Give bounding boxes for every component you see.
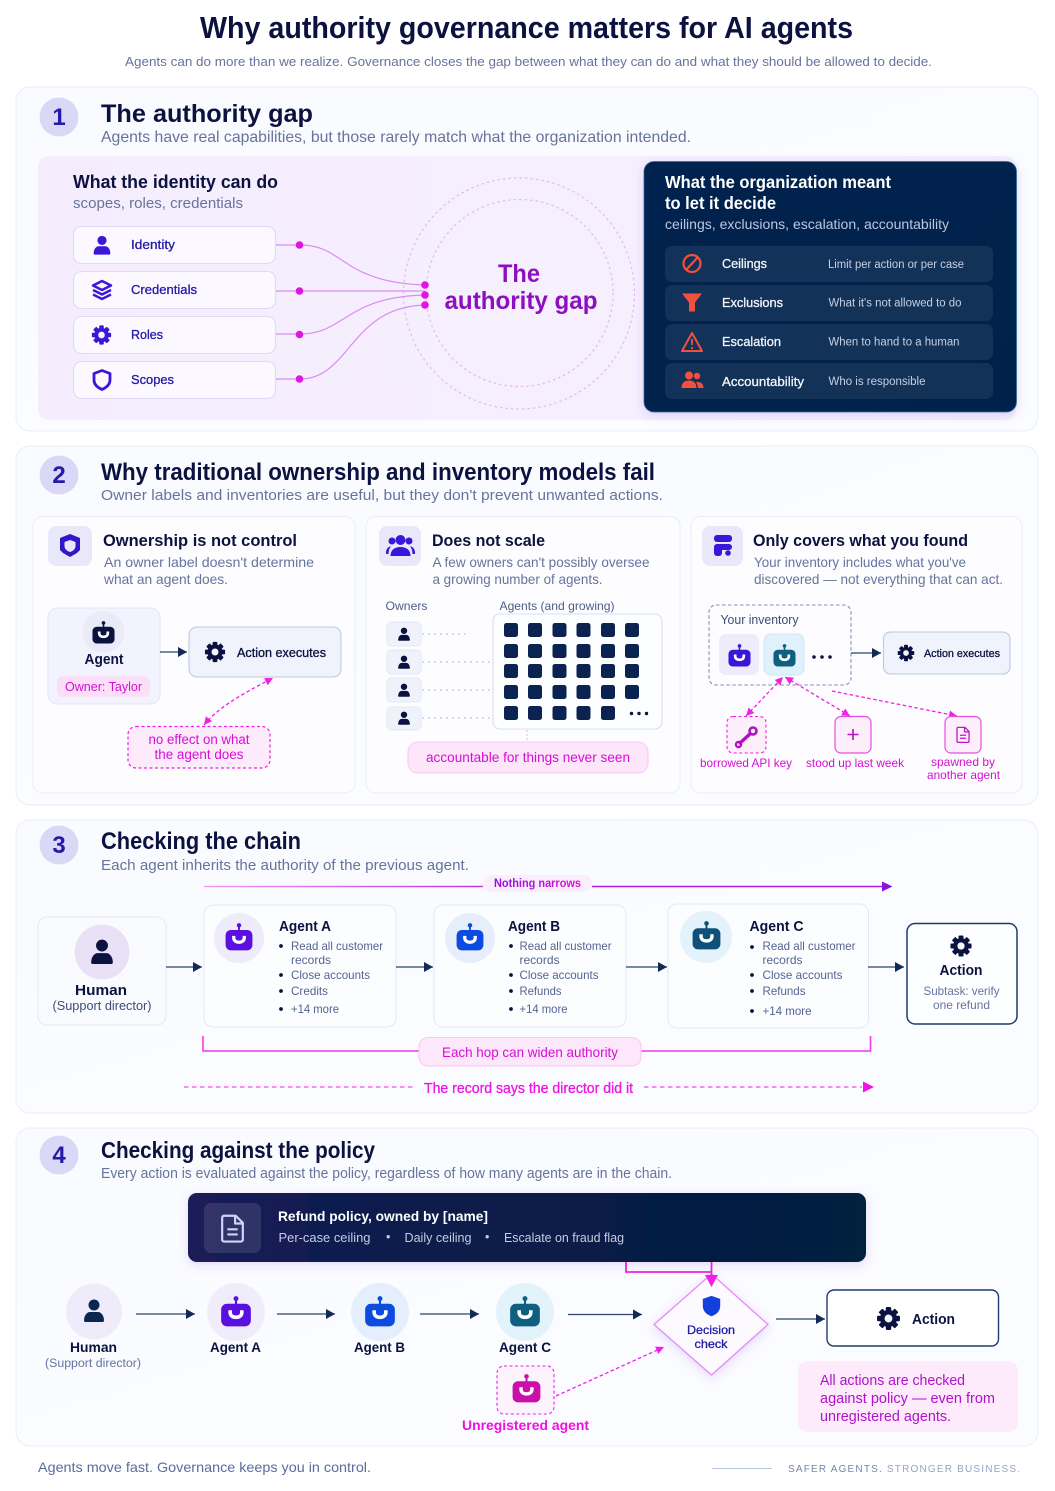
panel: section 3 checking the chain [16, 820, 1038, 1113]
action box: Action [940, 962, 982, 979]
flow node: human [45, 1284, 141, 1370]
row: accountability: Who is responsible [828, 376, 926, 388]
badge 4 [40, 1136, 78, 1174]
action box: one refund [933, 998, 990, 1012]
row: scopes: Scopes [131, 372, 174, 387]
agent box: Owner: Taylor [65, 680, 142, 694]
inventory box [709, 605, 851, 685]
arrow [396, 966, 433, 968]
dark panel: what the organization meant [644, 162, 1016, 412]
label: stood up last week: stood up last week [806, 756, 905, 770]
arrow [776, 1318, 825, 1320]
callout: all actions checked [798, 1361, 1018, 1432]
section description: Owner labels and inventories are useful, but they don't prevent unwanted actions. [101, 487, 663, 504]
card: only covers what you found [691, 516, 1022, 793]
flow node: human: (Support director) [45, 1358, 141, 1370]
decision check diamond: check [694, 1337, 729, 1351]
human box: Human [75, 982, 127, 999]
tile: spawned by another agent [945, 716, 981, 753]
agent A box: Credits [291, 984, 328, 998]
row: credentials: Credentials [131, 282, 197, 297]
card heading: Ownership is not control [103, 531, 297, 550]
badge 4: 4 [52, 1142, 66, 1169]
title: Why authority governance matters for AI agents [200, 10, 853, 45]
dotted links [422, 634, 493, 718]
card description: a growing number of agents. [432, 572, 602, 587]
card description [754, 555, 1003, 587]
arrow [420, 1313, 479, 1315]
agent B box: records [520, 953, 560, 967]
agent B box: Read all customer [520, 939, 612, 953]
section description: Every action is evaluated against the policy, regardless of how many agents are in the chain. [101, 1166, 672, 1182]
heading: The authority gap [101, 100, 313, 128]
card heading: Does not scale [432, 531, 545, 550]
action box: Subtask: verify [924, 984, 1000, 998]
badge 2 [40, 456, 78, 494]
gap circles [404, 178, 634, 409]
card description: what an agent does. [103, 572, 228, 587]
callout: no effect: no effect on what [148, 732, 250, 747]
connector from policy to decision [626, 1262, 718, 1287]
row: ceilings: Limit per action or per case [828, 259, 964, 271]
card description: A few owners can't possibly oversee [432, 555, 650, 570]
panel: section 1 the authority gap [16, 87, 1038, 431]
inventory box: Your inventory [720, 613, 799, 627]
policy items: Per-case ceiling [278, 1231, 371, 1245]
card description [103, 555, 314, 587]
agent grid [493, 614, 662, 729]
section description: Each agent inherits the authority of the previous agent. [101, 858, 469, 874]
dashed arrow: unregistered to decision [556, 1347, 664, 1396]
owner tiles [387, 622, 421, 730]
badge 3 [40, 826, 78, 864]
dark panel heading [665, 172, 891, 213]
footer slogan: SAFER AGENTS. STRONGER BUSINESS. [788, 1464, 1020, 1475]
agent C box: Agent C [750, 918, 804, 935]
agent B box: Refunds [520, 984, 562, 998]
policy items: • [386, 1230, 390, 1244]
unregistered agent [462, 1366, 589, 1433]
label: spawned by another agent [927, 755, 1001, 782]
arrow: nothing narrows: Nothing narrows [494, 878, 581, 890]
panel: section 4 checking against the policy [16, 1128, 1038, 1446]
tile: borrowed API key [727, 716, 766, 753]
arrow [166, 966, 202, 968]
agent B box: Agent B [508, 919, 560, 935]
action box: Action [912, 1311, 955, 1328]
bracket: each hop can widen authority [203, 1036, 870, 1066]
card heading: Only covers what you found [753, 531, 968, 550]
row: exclusions: What it's not allowed to do [828, 298, 962, 310]
owners label: Owners [386, 599, 428, 613]
left purple panel: identity [38, 156, 1016, 420]
row: credentials [74, 272, 276, 308]
section description: Agents have real capabilities, but those rarely match what the organization intended. [101, 129, 691, 146]
footer tagline: Agents move fast. Governance keeps you in control. [38, 1459, 371, 1475]
arrow [868, 966, 904, 968]
human box: (Support director) [52, 999, 152, 1013]
gap label: The [498, 260, 540, 288]
row: escalation: When to hand to a human [828, 336, 960, 348]
flow node: agent A: Agent A [210, 1339, 261, 1355]
agent A box: records [291, 953, 331, 967]
dashed arrows [746, 677, 957, 716]
dark panel subheading: ceilings, exclusions, escalation, accountability [665, 216, 949, 232]
identity subheading: scopes, roles, credentials [73, 196, 243, 212]
arrow: nothing narrows [204, 875, 892, 892]
row: escalation [665, 324, 993, 360]
action executes box [884, 632, 1010, 674]
policy bar [188, 1193, 866, 1262]
row: ceilings: Ceilings [722, 256, 767, 271]
label: borrowed API key: borrowed API key [700, 756, 792, 770]
dashed arrow: no effect [204, 678, 273, 725]
arrow [277, 1313, 335, 1315]
agent A box: +14 more [291, 1002, 339, 1016]
action box [827, 1290, 998, 1346]
dark panel heading: to let it decide [665, 193, 776, 213]
agent A box: Agent A [279, 919, 331, 935]
row: roles: Roles [131, 327, 163, 342]
unregistered agent: Unregistered agent [462, 1417, 589, 1433]
arrow to action [160, 651, 187, 653]
policy items: Daily ceiling [404, 1231, 472, 1245]
flow node: human: Human [70, 1339, 117, 1355]
row: identity [74, 226, 276, 264]
card description [432, 555, 650, 587]
pill: accountable: accountable for things never seen [426, 749, 630, 765]
decision check diamond: Decision [687, 1323, 735, 1337]
flow node: agent C [496, 1283, 554, 1355]
row: exclusions [665, 285, 993, 321]
agent C box: Refunds [762, 984, 806, 998]
row: ceilings [665, 246, 993, 282]
badge 3: 3 [52, 832, 66, 859]
agent A box [204, 905, 396, 1027]
icon: policy document [204, 1203, 261, 1253]
card description: Your inventory includes what you've [754, 555, 966, 570]
card description: discovered — not everything that can act. [754, 572, 1003, 587]
label: spawned by another agent: spawned by [931, 755, 995, 769]
dark panel heading: What the organization meant [665, 172, 891, 192]
row: identity: Identity [131, 237, 176, 252]
card: ownership is not control [33, 516, 355, 793]
arrow to action [851, 652, 881, 654]
row: scopes [74, 362, 276, 398]
action executes box: Action executes [237, 646, 326, 660]
row: exclusions: Exclusions [722, 295, 783, 310]
icon: inventory tile [702, 526, 743, 566]
icon: people tile [379, 526, 421, 566]
connectors to the gap [276, 241, 429, 383]
agent B box [434, 905, 626, 1027]
callout: all actions checked: against policy — even from [820, 1391, 995, 1407]
badge 1 [40, 98, 78, 136]
action executes box [189, 627, 341, 677]
agent C box [668, 904, 868, 1028]
badge 1: 1 [52, 104, 66, 131]
agent B box: +14 more [520, 1002, 568, 1016]
policy items [278, 1230, 624, 1245]
tile: stood up last week [835, 716, 871, 753]
gap label: authority gap [444, 287, 598, 315]
agent A box: Close accounts [291, 968, 370, 982]
agent C box: records [762, 953, 802, 967]
row: roles [74, 316, 276, 354]
agent C box: Read all customer [762, 939, 856, 953]
icon: shield tile [48, 526, 92, 566]
action box [907, 924, 1017, 1024]
card: does not scale [366, 516, 680, 793]
heading: Checking against the policy [101, 1137, 375, 1163]
arrow: the record says: The record says the director did it [424, 1081, 633, 1097]
heading: Why traditional ownership and inventory models fail [101, 459, 655, 486]
label: spawned by another agent: another agent [927, 768, 1001, 782]
callout: no effect: the agent does [154, 747, 244, 762]
arrow: the record says [184, 1081, 874, 1097]
policy items: • [485, 1230, 489, 1244]
agent C box: +14 more [762, 1004, 812, 1018]
arrow [568, 1314, 642, 1316]
gap label [444, 260, 598, 315]
callout: all actions checked: All actions are checked [820, 1373, 965, 1389]
agent A box: Read all customer [291, 939, 383, 953]
badge 2: 2 [52, 462, 66, 489]
policy title: Refund policy, owned by [name] [278, 1208, 488, 1224]
identity heading: What the identity can do [73, 172, 278, 192]
agent C box: Close accounts [762, 968, 842, 982]
row: escalation: Escalation [722, 334, 781, 349]
callout: no effect [128, 726, 270, 768]
dashed stub [526, 730, 528, 742]
decision check diamond [654, 1274, 768, 1375]
heading: Checking the chain [101, 828, 301, 855]
pill: accountable [408, 742, 648, 773]
row: accountability: Accountability [722, 374, 805, 389]
callout: all actions checked: unregistered agents. [820, 1409, 951, 1425]
agent B box: Close accounts [520, 968, 598, 982]
subtitle: Agents can do more than we realize. Governance closes the gap between what they can do and what they should be allowed to decide. [125, 54, 932, 69]
arrow [626, 966, 667, 968]
agents label: Agents (and growing) [500, 599, 614, 613]
panel: section 2 why traditional models fail [16, 446, 1038, 805]
action executes box: Action executes [924, 648, 1000, 660]
flow node: agent C: Agent C [499, 1339, 551, 1355]
flow node: agent B: Agent B [354, 1339, 405, 1355]
agent box: Agent [84, 652, 124, 668]
agent box [48, 608, 160, 704]
flow node: agent A [207, 1283, 265, 1355]
arrow [136, 1313, 195, 1315]
human box [38, 917, 166, 1025]
flow node: agent B [351, 1283, 409, 1355]
policy items: Escalate on fraud flag [504, 1231, 624, 1245]
bracket: each hop can widen authority: Each hop can widen authority [442, 1044, 618, 1060]
card description: An owner label doesn't determine [104, 555, 314, 570]
row: accountability [665, 363, 993, 399]
